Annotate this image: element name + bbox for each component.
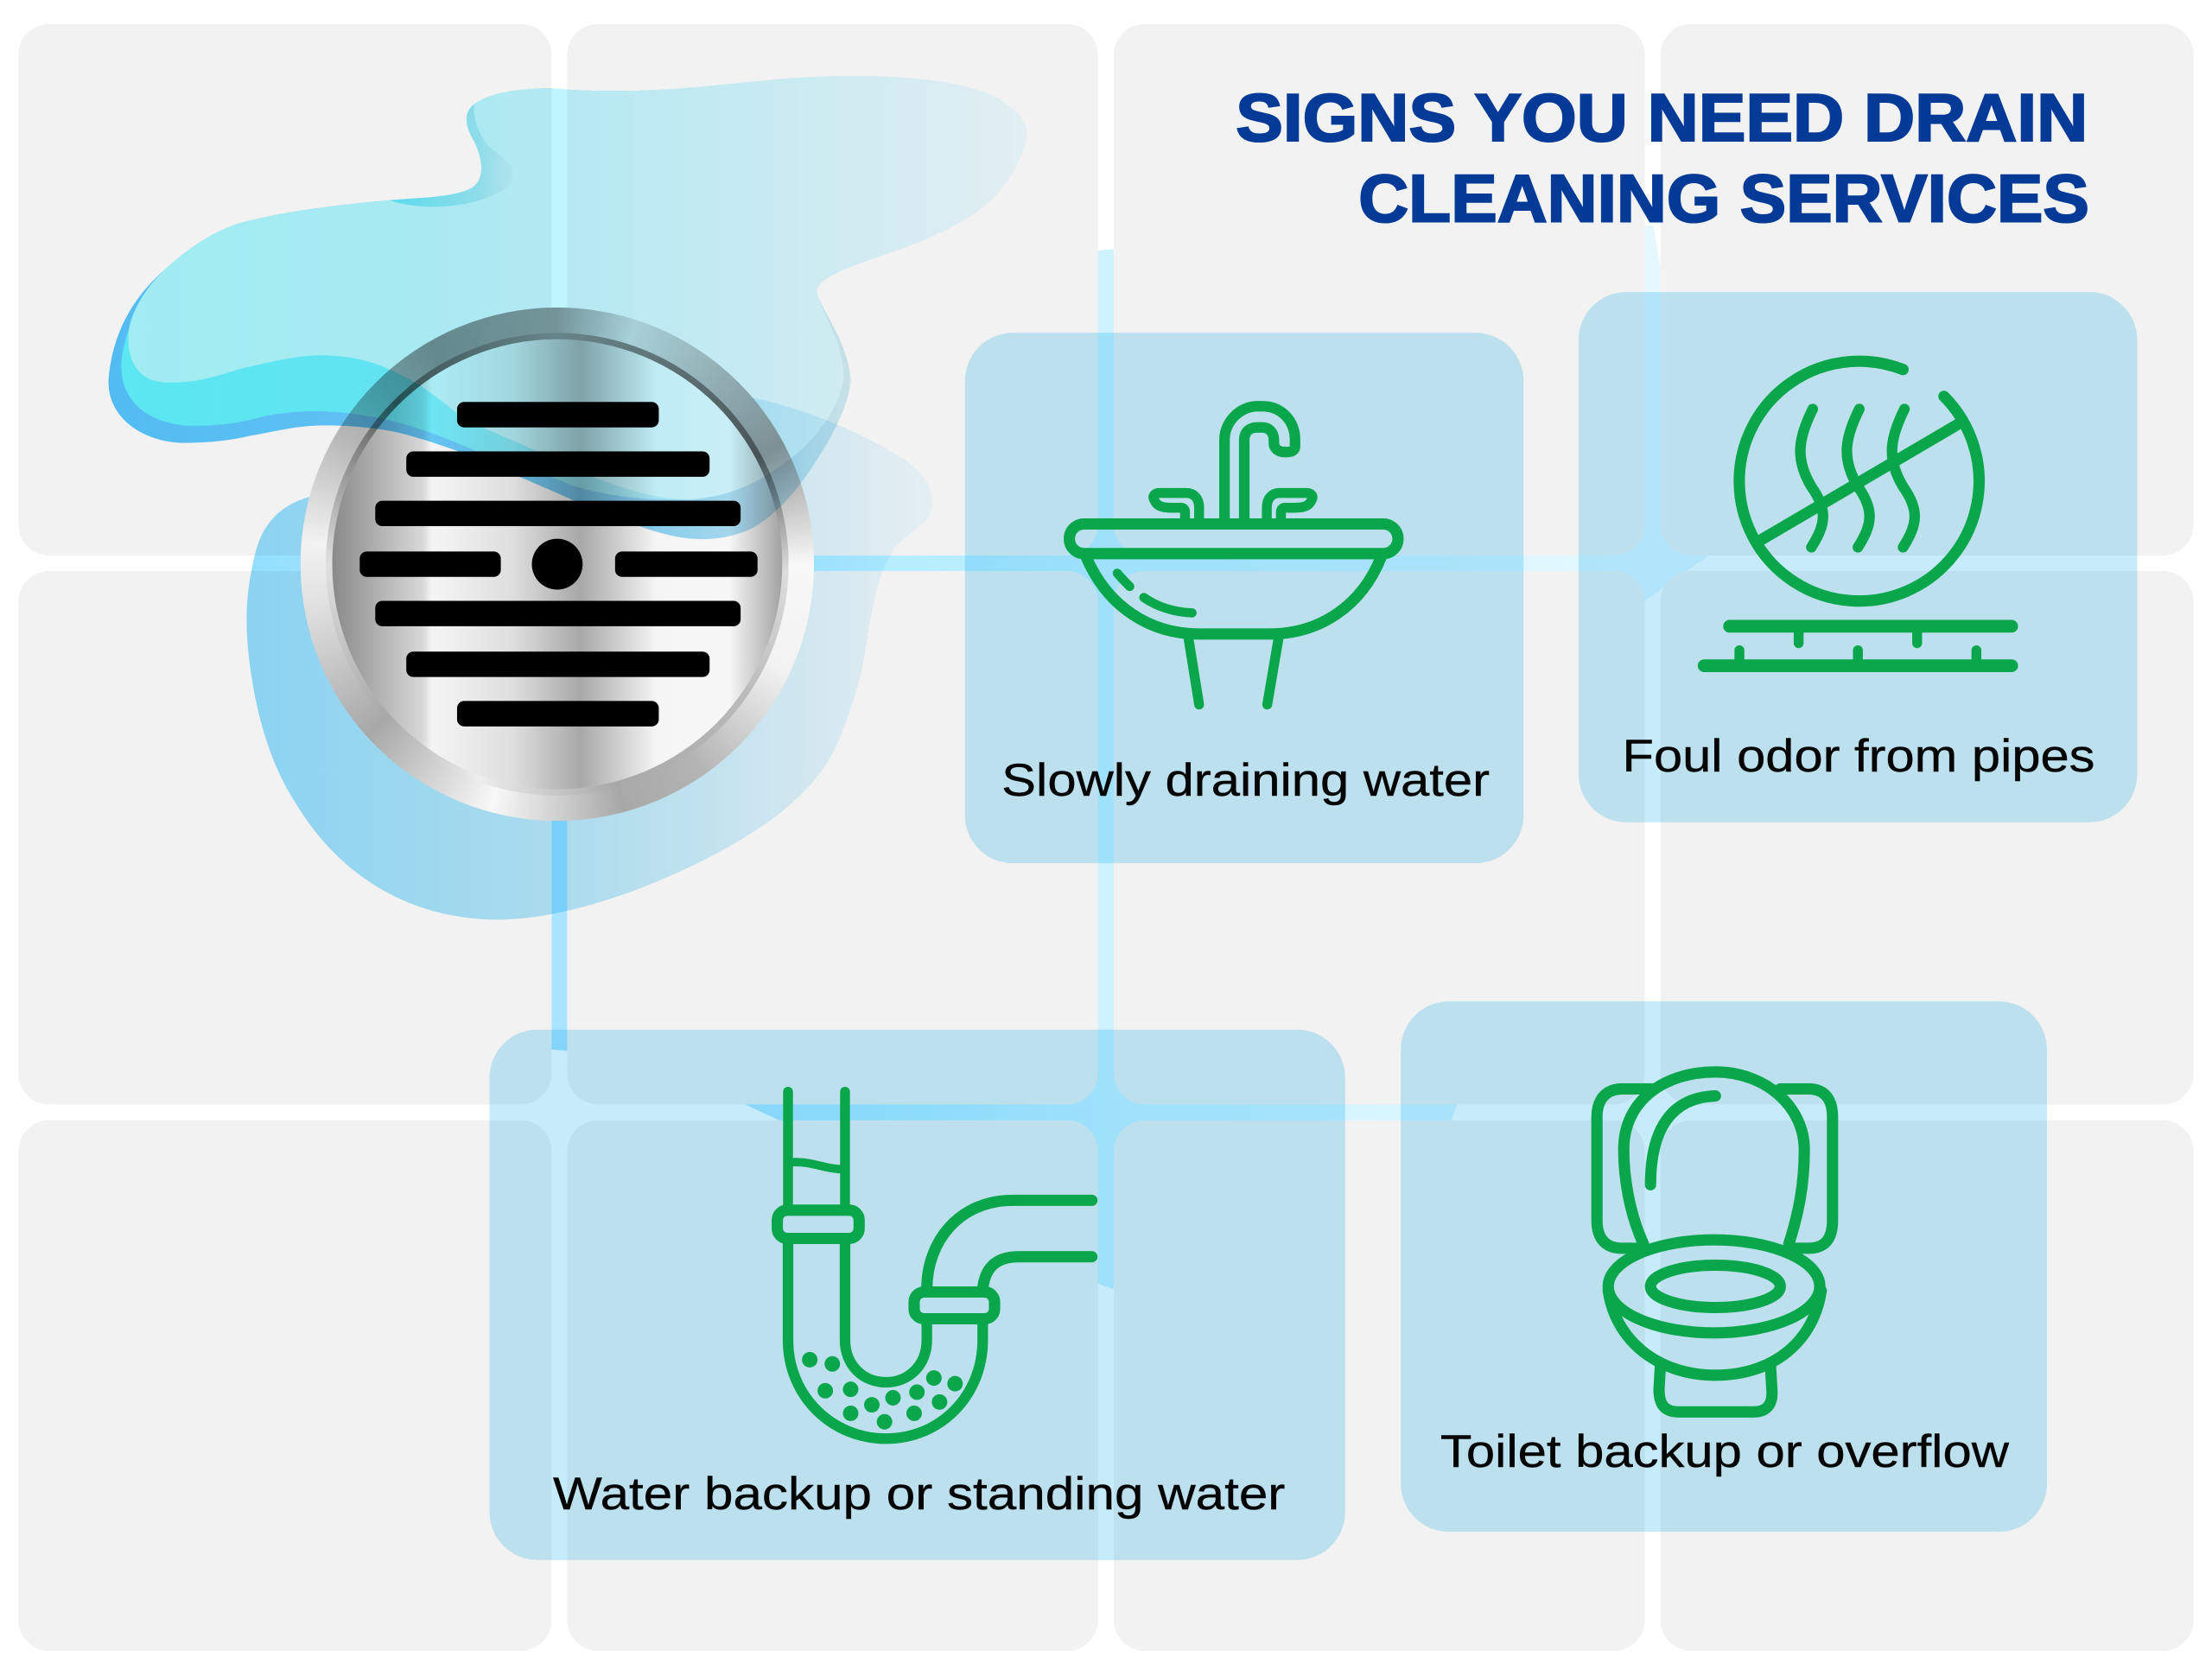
title (1236, 79, 2089, 236)
panel: toilet backup or overflow (1401, 1001, 2047, 1532)
label: Slowly draining water (1001, 755, 1490, 806)
title: CLEANING SERVICES (1358, 160, 2089, 236)
title: SIGNS YOU NEED DRAIN (1236, 79, 2088, 156)
label: Foul odor from pipes (1623, 731, 2094, 782)
background glow visible through tile gaps (466, 225, 1708, 1289)
water blob: lower (246, 395, 932, 919)
drain outer metal ring (301, 308, 814, 821)
label: Water backup or standing water (553, 1469, 1285, 1520)
panel: slowly draining water (965, 333, 1523, 863)
panel: water backup or standing water (490, 1030, 1345, 1560)
floor drain (301, 308, 814, 821)
label: Toilet backup or overflow (1440, 1426, 2010, 1477)
icon: sink (1070, 406, 1398, 705)
drain slots (359, 402, 758, 727)
icon: no odor over pipes (1704, 361, 2012, 666)
water blob: upper (109, 76, 1027, 539)
panel: foul odor from pipes (1579, 292, 2137, 822)
drain plate (332, 340, 782, 789)
icon: clogged p-trap (778, 1092, 1092, 1438)
drain inner ring (326, 333, 789, 796)
icon: toilet (1597, 1072, 1833, 1412)
